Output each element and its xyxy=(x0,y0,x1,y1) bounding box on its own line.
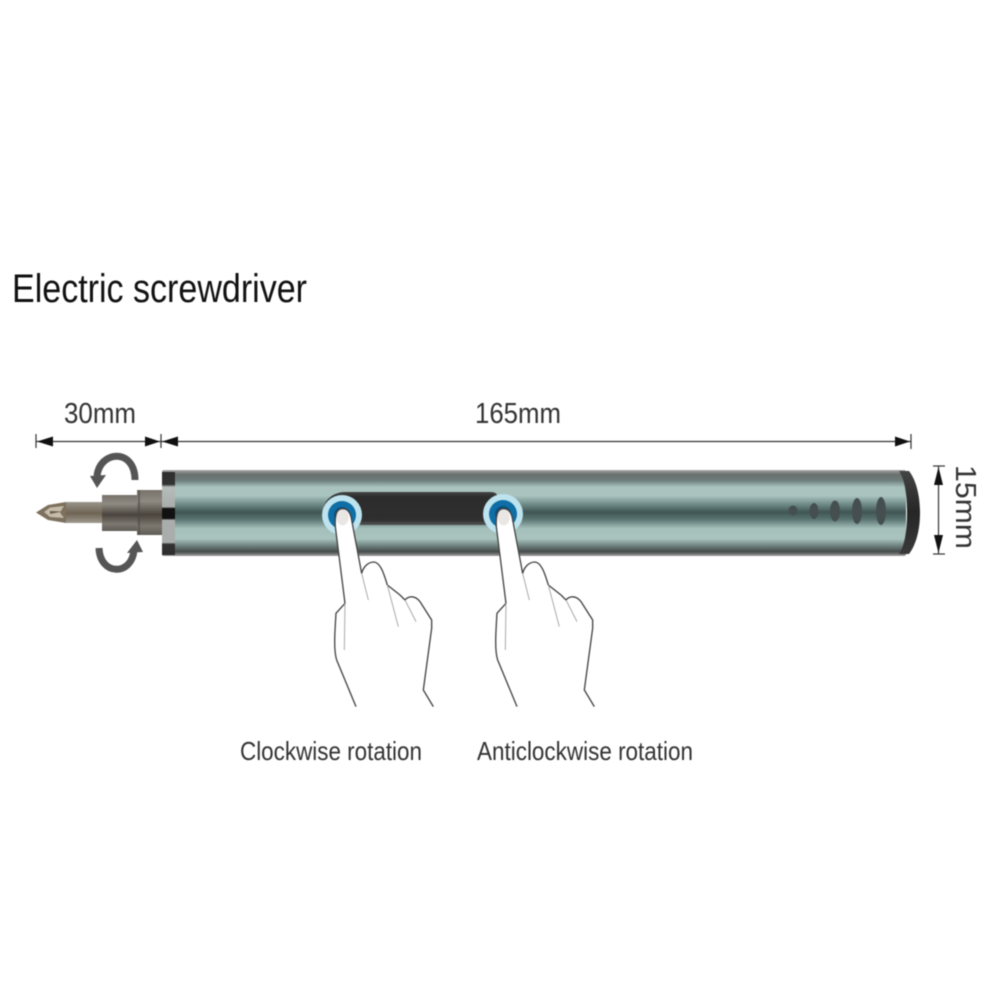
dimension: 165mm: 165mm xyxy=(475,398,561,430)
dimension: 30mm xyxy=(36,398,161,448)
button: anticlockwise xyxy=(483,494,523,534)
hand: anticlockwise xyxy=(496,509,594,707)
icon: rotation arrow top xyxy=(90,456,135,488)
hand: clockwise xyxy=(335,509,433,707)
label: anticlockwise rotation: Anticlockwise rotation xyxy=(477,736,693,766)
vent holes xyxy=(788,497,886,525)
dimension: 15mm xyxy=(933,465,981,554)
label: clockwise rotation: Clockwise rotation xyxy=(240,736,422,766)
dimension: 15mm: 15mm xyxy=(949,465,981,549)
screwdriver body xyxy=(162,470,920,556)
icon: rotation arrow bottom xyxy=(99,540,143,569)
end cap xyxy=(899,471,920,554)
dimension: 30mm: 30mm xyxy=(64,398,136,430)
button: clockwise xyxy=(322,495,362,535)
screwdriver tip and collars xyxy=(36,490,163,535)
front ring xyxy=(162,472,175,555)
title: Electric screwdriver xyxy=(12,267,307,311)
dimension: 165mm xyxy=(161,398,911,449)
button slot xyxy=(323,492,498,525)
